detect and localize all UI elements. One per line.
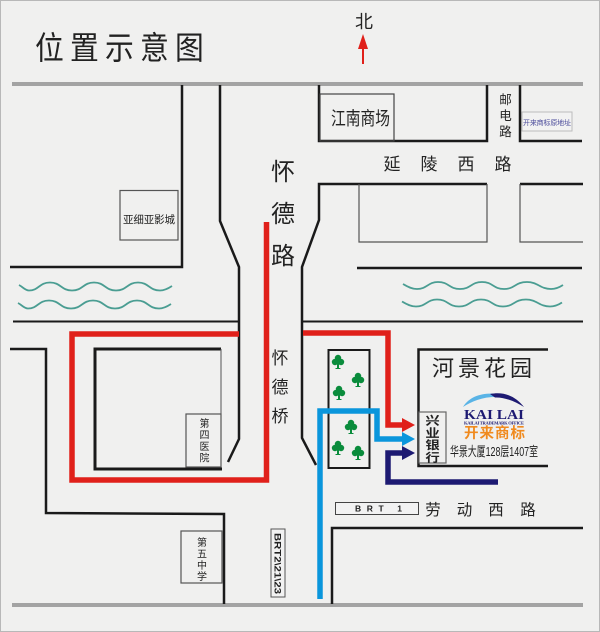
box: BRT 1: BRT 1: [355, 504, 402, 514]
box: Industrial Bank: 银: [425, 438, 440, 452]
box: Fifth middle school: 学: [197, 570, 207, 583]
box: Asia cinema: 亚细亚影城: [123, 213, 176, 226]
box: Industrial Bank: 兴: [425, 414, 440, 427]
label: Huaide Bridge: [272, 349, 288, 426]
label: Yanling West Road: 延: [384, 155, 400, 174]
blue route arrow: [320, 411, 415, 599]
box: Industrial Bank: 行: [425, 451, 440, 464]
box: BRT 1: [336, 502, 418, 514]
building: hospital block: [95, 349, 222, 469]
box: Fifth middle school: 第: [197, 536, 207, 549]
logo: Kai Lai: KAI LAI: [464, 408, 524, 423]
building: Hejing garden outline: [418, 350, 548, 466]
box: Fifth middle school: [181, 531, 222, 583]
building outlines: [359, 184, 583, 242]
box: Fourth hospital: 四: [200, 430, 210, 442]
box: Fourth hospital: 第: [200, 417, 210, 430]
park block with trees: [328, 350, 370, 468]
box: Fourth hospital: 医: [200, 441, 210, 453]
north arrow: 北: [355, 12, 373, 32]
address text: 华景大厦128层1407室: [450, 444, 538, 459]
box: BRT 2/21/23: [271, 529, 285, 597]
navy route arrow: [388, 446, 498, 482]
box: Industrial Bank: [419, 412, 446, 464]
label: Laodong West Road: 劳: [425, 501, 441, 519]
north arrow: [355, 12, 373, 64]
label: Laodong West Road: [425, 501, 536, 519]
road network lines: [10, 85, 583, 604]
label: Huaide Road: 路: [271, 243, 295, 270]
box: Fifth middle school: 中: [197, 559, 207, 572]
label: Hejing garden: 河景花园: [432, 356, 536, 381]
box: Fifth middle school: 五: [197, 550, 207, 560]
box: Asia cinema: [120, 190, 178, 240]
red route arrow: [303, 333, 415, 432]
red route west: [72, 222, 266, 480]
label: Huaide Road: [271, 159, 295, 270]
river right: [402, 282, 563, 306]
logo: Kai Lai: [463, 393, 526, 442]
box: original address: [522, 112, 572, 131]
label: Huaide Bridge: 德: [272, 378, 288, 397]
label: Laodong West Road: 动: [457, 501, 472, 519]
label: Laodong West Road: 路: [520, 501, 536, 519]
label: Yanling West Road: 路: [494, 155, 512, 174]
box: Jiangnan mall: [320, 94, 394, 141]
river left: [18, 282, 172, 308]
box: BRT 2/21/23: BRT2\21\23: [272, 533, 282, 594]
label: Laodong West Road: 西: [488, 502, 504, 519]
label: Huaide Bridge: 桥: [272, 407, 288, 426]
box: Fourth hospital: 院: [200, 452, 210, 464]
label: Yanling West Road: 陵: [420, 155, 438, 174]
label: Huaide Road: 德: [271, 201, 295, 228]
logo: Kai Lai: KAILAI TRADEMARK OFFICE: [464, 420, 524, 426]
label: Youdian Road: 路: [499, 124, 512, 139]
tree group: [332, 355, 364, 460]
title: 位置示意图: [35, 31, 210, 66]
box: Jiangnan mall: 江南商场: [331, 108, 390, 129]
label: Huaide Road: 怀: [271, 159, 295, 186]
grey boundary bars: [12, 82, 583, 607]
box: original address: 开来商标原地址: [523, 118, 571, 127]
label: Youdian Road: 电: [499, 109, 512, 123]
label: Youdian Road: 邮: [499, 93, 512, 107]
label: Youdian Road: [499, 93, 512, 139]
logo: Kai Lai: 开来商标: [464, 424, 526, 442]
label: Huaide Bridge: 怀: [272, 349, 288, 368]
label: Yanling West Road: [384, 155, 512, 174]
box: Industrial Bank: 业: [425, 426, 440, 440]
label: Yanling West Road: 西: [458, 155, 474, 174]
box: Fourth hospital: [186, 414, 221, 467]
